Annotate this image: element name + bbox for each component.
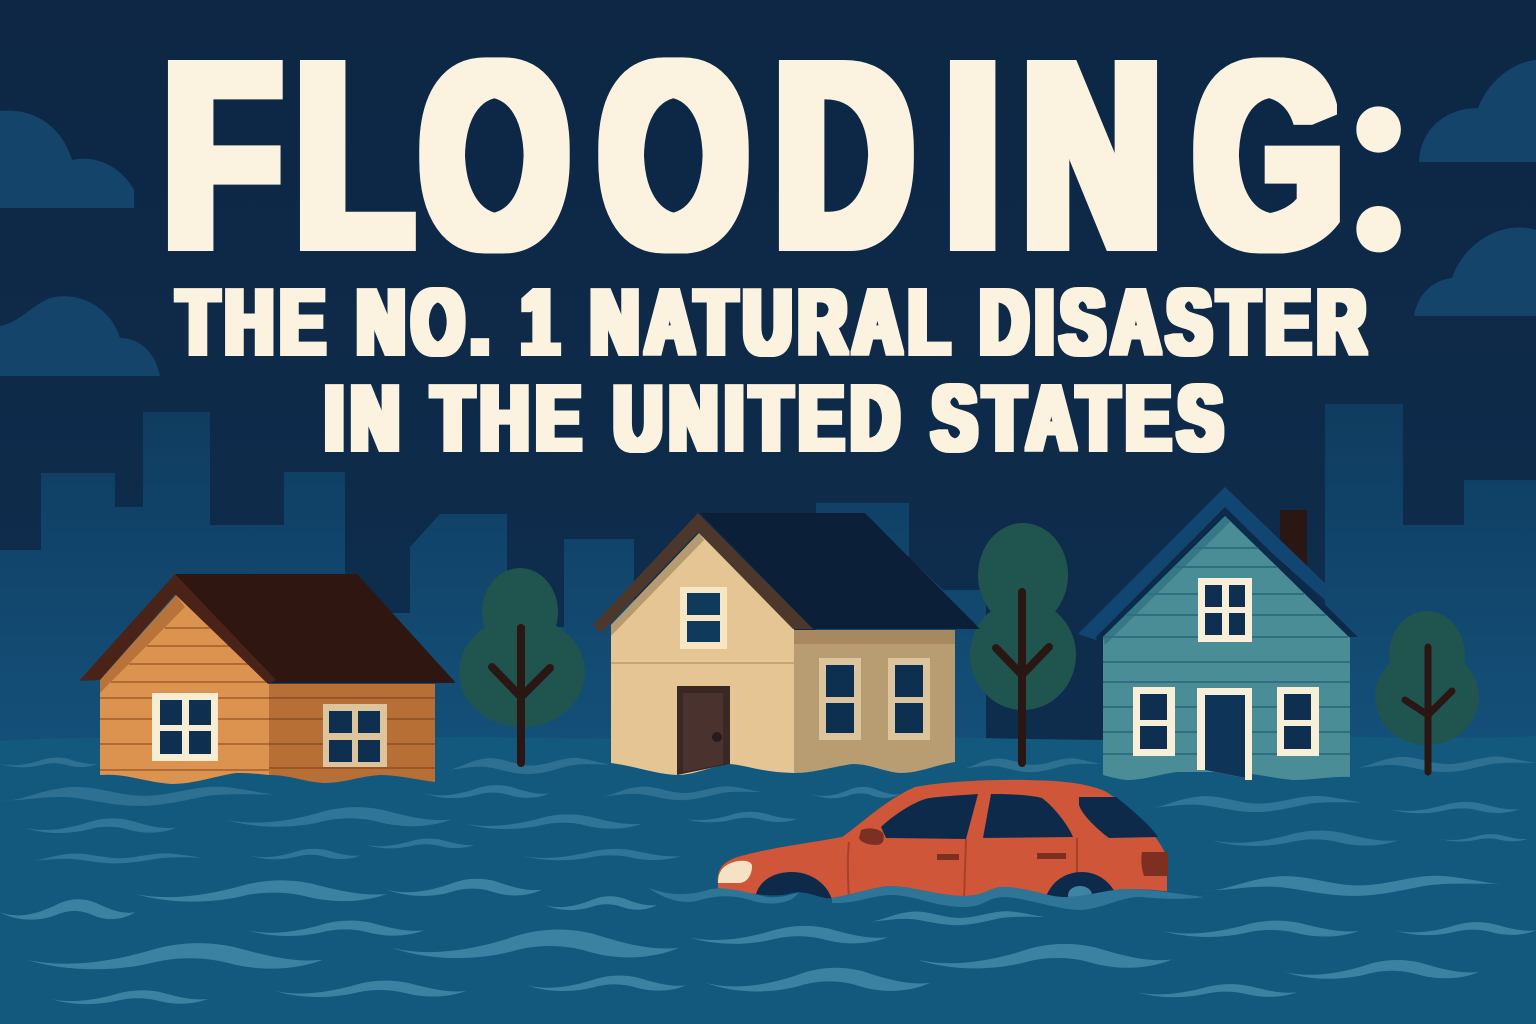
house: orange xyxy=(79,574,455,784)
subtitle line 2: IN THE UNITED STATES xyxy=(325,367,1222,471)
lower water wave highlights xyxy=(0,876,1536,1004)
subtitle line 1: THE NO. 1 NATURAL DISASTER xyxy=(177,271,1365,375)
title: FLOODING: FLOODING xyxy=(164,8,1343,302)
tree: between middle and right house xyxy=(970,523,1076,763)
flood water body xyxy=(0,736,1536,1024)
water in front of car xyxy=(700,886,1175,925)
car xyxy=(718,780,1168,904)
car waterline waves xyxy=(649,886,1204,910)
title colon: : xyxy=(1342,0,1415,299)
house: teal xyxy=(1078,487,1358,780)
tree: far right xyxy=(1375,611,1479,772)
house: tan xyxy=(593,513,980,775)
storm clouds xyxy=(0,60,1536,376)
upper wave highlights xyxy=(0,757,1536,806)
city skyline silhouette xyxy=(0,404,1536,760)
mid water wave highlights xyxy=(25,785,1528,863)
tree: left of middle house xyxy=(459,568,585,763)
